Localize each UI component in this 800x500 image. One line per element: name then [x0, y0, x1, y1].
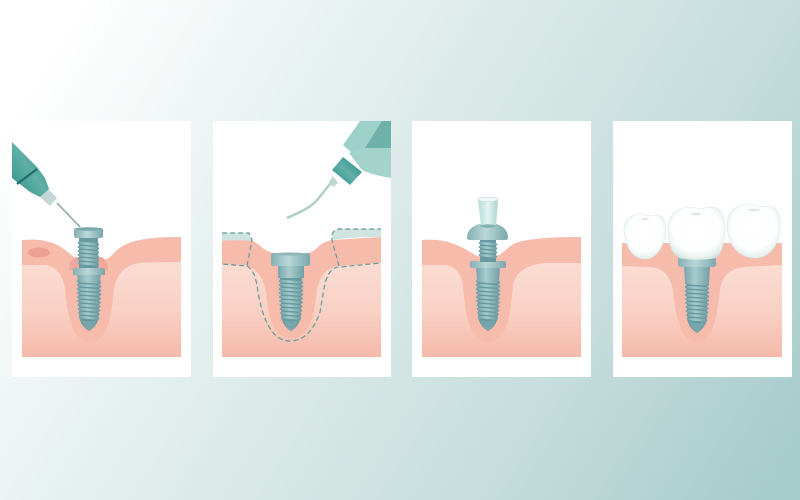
abutment screw — [467, 223, 508, 262]
gum and bone 4 — [622, 243, 782, 357]
tooth surface marks — [641, 209, 760, 220]
implant under crown — [678, 257, 716, 333]
panel 3: healing abutment — [412, 121, 591, 377]
implant with healing cap — [271, 252, 310, 331]
gum and bone 1 — [22, 237, 181, 357]
implant screw upper — [74, 227, 103, 270]
instrument: drill handpiece — [12, 142, 80, 227]
gum and bone 3 — [422, 237, 581, 357]
card 3 — [412, 121, 591, 377]
tooth left — [624, 214, 666, 259]
tooth centre crown — [668, 207, 725, 260]
card 4 — [613, 121, 792, 377]
implant — [470, 261, 506, 331]
panel 1: drilling the implant — [12, 121, 191, 377]
dashed incision lines — [222, 229, 381, 341]
gum and bone 2 — [222, 229, 381, 357]
instrument: gloved hand with dental tool — [287, 121, 391, 218]
gum hole — [28, 248, 50, 258]
implant lower — [73, 268, 105, 331]
panel 4: final crown — [613, 121, 792, 377]
panel 2: exposing the implant — [213, 121, 391, 377]
card 2 — [213, 121, 391, 377]
clear cap — [478, 197, 498, 228]
tooth right — [727, 204, 780, 258]
card 1 — [12, 121, 191, 377]
